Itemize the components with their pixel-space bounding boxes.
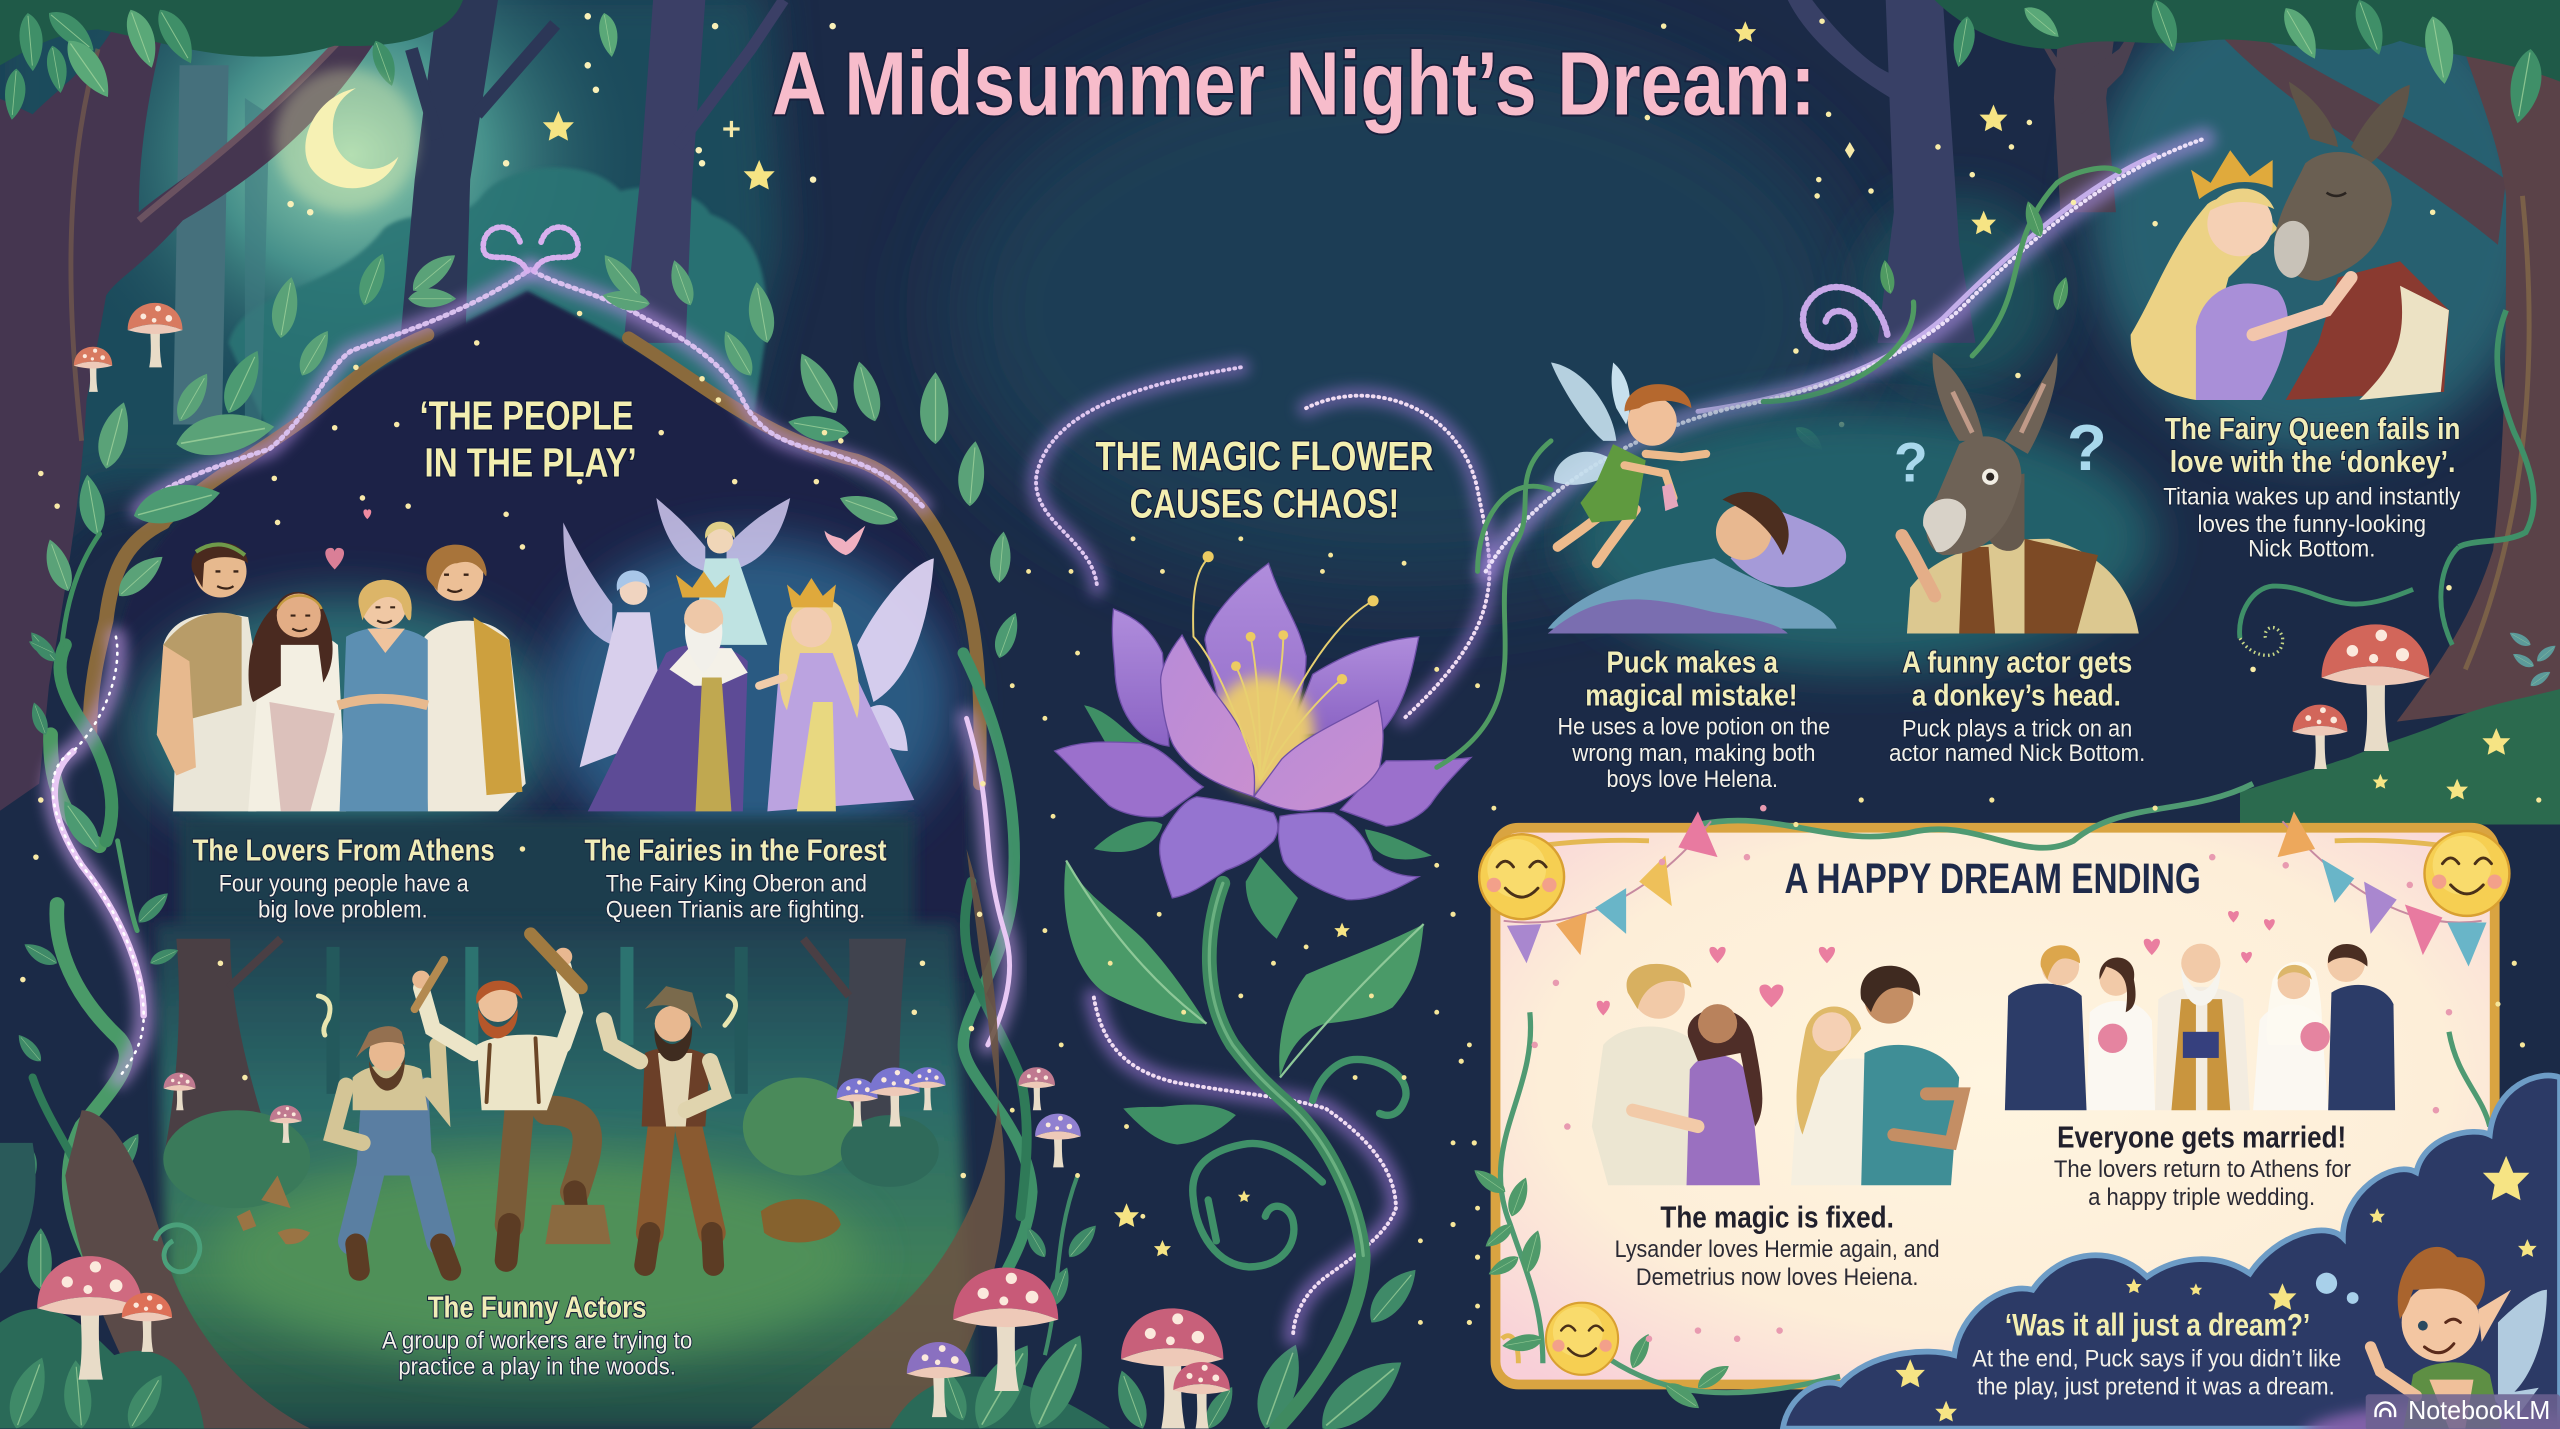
title: A Midsummer Night’s Dream:: [772, 34, 1816, 134]
actor middle: [412, 934, 587, 1260]
actor left: [333, 1026, 451, 1270]
illustration: Puck makes a mistake: [1548, 362, 1846, 633]
illustration: fairies in the forest: [563, 498, 934, 811]
cloud text: At the end, Puck says if you didn’t like: [1972, 1346, 2341, 1373]
heading: the magic flower causes chaos: THE MAGIC FLOWER: [1096, 433, 1433, 479]
text: fairy queen falls for the donkey: Titania wakes up and instantly: [2163, 483, 2461, 510]
text: the magic is fixed: [1615, 1202, 1940, 1291]
heading: the people in the play: ‘THE PEOPLE: [420, 392, 633, 438]
foliage and mushrooms: bottom left: [0, 1143, 204, 1429]
stem leaves: [1064, 860, 1424, 1144]
top vine: [1698, 784, 2253, 848]
foliage and mushrooms: bottom centre: [890, 1067, 1425, 1429]
donkey head: [2289, 82, 2338, 147]
text: everyone gets married: The lovers return to Athens for: [2054, 1157, 2351, 1183]
woman three: [338, 580, 428, 811]
woman two: [248, 592, 346, 811]
cloud text: [1972, 1306, 2341, 1400]
right tree trunk bottom: [751, 849, 1005, 1429]
question marks: ?: [1894, 432, 1928, 494]
text: fairies in the forest: The Fairies in the Forest: [584, 834, 887, 867]
text: Puck makes a magical mistake: magical mistake!: [1585, 679, 1798, 712]
text: lovers from Athens: big love problem.: [258, 897, 428, 924]
trees: top-right trunks and canopy: [1788, 0, 2560, 722]
text: the magic is fixed: The magic is fixed.: [1660, 1202, 1894, 1235]
forest trees: [163, 939, 906, 1159]
queen: [767, 578, 914, 811]
badge: NotebookLM: [2366, 1394, 2560, 1429]
stars: top left: [291, 16, 833, 212]
stem: [1209, 883, 1363, 1429]
glitter on arch: [139, 227, 922, 511]
Titania head: [2207, 191, 2273, 256]
text: fairy queen falls for the donkey: love with the ‘donkey’.: [2170, 446, 2456, 479]
text: the magic is fixed: Demetrius now loves Heiena.: [1636, 1265, 1918, 1291]
bird: [824, 526, 865, 555]
music notes: [318, 996, 736, 1035]
wood pile: [761, 1199, 841, 1242]
illustration: actor with donkey head: [1894, 353, 2139, 633]
glow behind lovers: [131, 596, 555, 857]
text: Puck makes a magical mistake: wrong man, making both: [1571, 740, 1816, 767]
text: fairy queen falls for the donkey: The Fairy Queen fails in: [2165, 413, 2460, 446]
leaves on the trail: [1792, 199, 2072, 454]
mushrooms on left tree: [74, 303, 183, 392]
text: lovers from Athens: Four young people have a: [219, 870, 469, 897]
man one: [157, 542, 264, 811]
text: funny actor gets a donkey's head: A funny actor gets: [1902, 647, 2132, 680]
stars: top right: [1647, 21, 2449, 669]
small stones: [237, 1176, 310, 1244]
bushes behind the arch: [229, 168, 767, 490]
cloud stars: [1895, 1156, 2537, 1421]
flower core glow: [1210, 676, 1314, 793]
couples illustration: [1592, 947, 1962, 1185]
question marks: ?: [2067, 411, 2107, 484]
panel: a happy dream ending: [1470, 784, 2509, 1414]
arch branches: [90, 335, 980, 784]
donkey body: [2286, 261, 2449, 400]
frame top scrolls: [1502, 840, 2465, 1363]
glow behind fairies: [547, 539, 955, 865]
text: fairy queen falls for the donkey: loves the funny-looking: [2198, 511, 2426, 538]
text: fairies in the forest: The Fairy King Oberon and: [606, 870, 867, 897]
trees: top-left trunks and branches: [0, 0, 784, 816]
cloud shape: [1783, 1076, 2560, 1429]
text: the funny actors: The Funny Actors: [428, 1292, 647, 1325]
heading: the magic flower causes chaos: [1096, 433, 1433, 527]
magic flower: [1055, 551, 1471, 1429]
heading: A HAPPY DREAM ENDING: [1784, 855, 2201, 902]
text: lovers from Athens: The Lovers From Athens: [193, 834, 495, 867]
smiley bottom left: [1546, 1303, 1618, 1375]
text: fairies in the forest: Queen Trianis are fighting.: [606, 897, 865, 924]
text: the funny actors: practice a play in the woods.: [398, 1354, 676, 1381]
moon: crescent with glow: [274, 69, 418, 212]
petals: [1205, 563, 1306, 793]
text: fairy queen falls for the donkey: [2163, 413, 2461, 563]
text: everyone gets married: [2054, 1122, 2351, 1211]
cloud text: ‘Was it all just a dream?’: [2005, 1306, 2310, 1342]
text: Puck makes a magical mistake: He uses a love potion on the: [1558, 714, 1830, 741]
text: Puck makes a magical mistake: Puck makes a: [1607, 647, 1778, 680]
man four: [424, 545, 526, 811]
sparkles around card: [1453, 800, 2539, 1322]
winking Puck: [2371, 1247, 2547, 1429]
fairy blue: [580, 570, 666, 767]
left root: [65, 1110, 310, 1429]
text: funny actor gets a donkey's head: actor named Nick Bottom.: [1889, 740, 2145, 767]
background: centre teal wash: [947, 33, 1861, 588]
wings back fairy: [563, 498, 790, 645]
arch interior: [118, 291, 967, 980]
text: fairy queen falls for the donkey: Nick Bottom.: [2248, 536, 2376, 563]
stump: [545, 1205, 611, 1244]
text: the magic is fixed: Lysander loves Hermie again, and: [1615, 1237, 1940, 1263]
heading: the magic flower causes chaos: CAUSES CHAOS!: [1130, 481, 1399, 527]
curling tendrils: [1193, 1059, 1406, 1267]
text: funny actor gets a donkey's head: [1889, 647, 2145, 767]
sparkles around flower: [1012, 539, 1494, 1322]
forest backdrop: [155, 922, 971, 1429]
text: Puck makes a magical mistake: [1558, 647, 1830, 793]
stars: around flower: [1114, 922, 1350, 1256]
card vines and confetti: [1470, 808, 2490, 1414]
glitter trail from flower to Titania: [1437, 139, 2204, 767]
badge: NotebookLM: NotebookLM: [2408, 1395, 2550, 1425]
bunting left: [1504, 811, 1718, 963]
wedding illustration: [2005, 911, 2395, 1110]
text: fairies in the forest: [584, 834, 887, 924]
text: the funny actors: [382, 1292, 692, 1381]
text: everyone gets married: Everyone gets married!: [2057, 1122, 2346, 1155]
band behind captions: [180, 816, 914, 931]
heading: the people in the play: [420, 392, 637, 486]
question marks: [1894, 411, 2107, 494]
panel: the people in the play, arch: [13, 227, 1032, 1429]
glow behind sleeper and donkey: [1567, 408, 2155, 669]
flying Puck: [1551, 362, 1706, 563]
heading: the people in the play: IN THE PLAY’: [424, 440, 637, 486]
Titania hair: [2131, 198, 2278, 400]
fairy top: [692, 522, 767, 645]
left vine leaves: [13, 628, 180, 1290]
actor right: [604, 986, 722, 1265]
canopy: top-right leaves: [1935, 0, 2560, 126]
dream bubbles: [2316, 1273, 2359, 1304]
card frame: [1496, 828, 2495, 1384]
spiral: [1803, 287, 1887, 347]
illustration: lovers from Athens: [157, 542, 526, 811]
background: top-left forest: [0, 0, 784, 588]
sepals: [1084, 705, 1432, 939]
text: Puck makes a magical mistake: boys love Helena.: [1607, 766, 1778, 793]
stamens: [1193, 558, 1373, 780]
king: [588, 571, 748, 811]
Titania dress: [2196, 283, 2288, 400]
text: funny actor gets a donkey's head: a donkey’s head.: [1912, 679, 2121, 712]
queen wings: [857, 558, 934, 751]
green vine: [1763, 168, 2119, 402]
illustration: the funny actors: [237, 934, 841, 1270]
purple mist: [2302, 1404, 2560, 1429]
text: the funny actors: A group of workers are trying to: [382, 1328, 692, 1355]
smiley top right: [2424, 831, 2509, 916]
canopy: top-left leaves: [0, 0, 621, 121]
text: lovers from Athens: [193, 834, 495, 924]
text: funny actor gets a donkey's head: Puck plays a trick on an: [1902, 715, 2132, 742]
stars and fireflies in arch: [23, 313, 983, 1176]
sleeping man: [1548, 492, 1846, 633]
left vine column: [33, 534, 144, 1257]
illustration: Titania and the donkey: [2131, 82, 2449, 400]
arch leaves: [39, 246, 1024, 661]
bushes and purple mushrooms: [163, 1067, 946, 1208]
magic sparkle trail around flower: [1036, 367, 1489, 1337]
vine and mushrooms: right ground: [2240, 310, 2560, 824]
cloud text: the play, just pretend it was a dream.: [1977, 1373, 2335, 1400]
dream cloud: was it all just a dream: [1783, 1076, 2560, 1429]
hearts: [1597, 947, 1835, 1016]
right vine column: [963, 653, 1032, 1306]
heart accents above lovers: [325, 509, 371, 569]
text: everyone gets married: a happy triple wedding.: [2088, 1185, 2315, 1211]
hearts: [2144, 911, 2275, 963]
bunting right: [2278, 811, 2487, 967]
smiley top left: [1479, 834, 1564, 919]
